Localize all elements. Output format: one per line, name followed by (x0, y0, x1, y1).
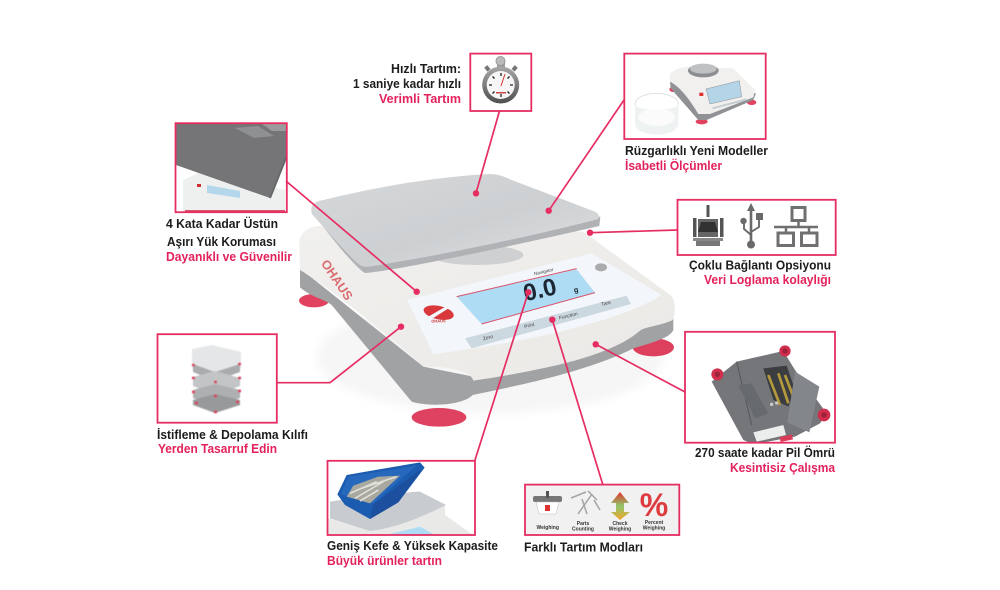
text: overload: Dayanıklı ve Güvenilir (166, 250, 292, 264)
icon: percent weighing: % (640, 487, 668, 523)
text: weighing modes: Farklı Tartım Modları (524, 540, 643, 554)
main product: precision scale (299, 174, 675, 427)
line: large pan (475, 289, 532, 460)
icon: check weighing: Weighing (609, 526, 631, 532)
frame (158, 334, 277, 423)
function button strip: Zero (482, 334, 494, 342)
LCD display: 0.0 (521, 273, 559, 307)
LCD display: g (573, 285, 579, 295)
text: fast weighing (353, 62, 461, 106)
text: draft shield: İsabetli Ölçümler (625, 158, 722, 173)
line: battery life (592, 341, 685, 392)
frame (624, 54, 766, 139)
image: stacked scales (192, 345, 241, 413)
icon: stopwatch (482, 56, 519, 104)
stainless steel pan rim (312, 210, 600, 273)
callout lines with anchor dots (277, 100, 685, 484)
scale soft shadow (317, 300, 663, 413)
OHAUS logo on panel: OHAUS (431, 318, 446, 324)
function button strip: Print (524, 322, 536, 330)
icon: weighing: Weighing (536, 525, 559, 531)
text: connectivity (689, 258, 831, 287)
function button strip: Tare (601, 300, 612, 308)
front foot (412, 408, 466, 427)
text: connectivity: Veri Loglama kolaylığı (704, 273, 831, 287)
text: draft shield: Rüzgarlıklı Yeni Modeller (625, 144, 768, 158)
line: stacking (277, 324, 404, 383)
line: overload protection (286, 181, 420, 295)
icon: check weighing: Check (612, 521, 628, 527)
text: draft shield (625, 144, 768, 173)
stainless steel pan (311, 174, 599, 267)
frame (328, 461, 475, 535)
rear left foot (299, 294, 329, 307)
icon: parts counting: Counting (572, 526, 594, 532)
icon: parts counting: Parts (577, 521, 589, 527)
frame (176, 123, 287, 212)
line: fast weighing (473, 111, 500, 196)
image: concrete block on scale (176, 124, 286, 213)
white housing (299, 226, 675, 381)
LCD display: Navigator (533, 267, 554, 276)
infographic canvas (156, 52, 837, 568)
panel: large pan and capacity (327, 461, 498, 568)
OHAUS side logo: OHAUS (318, 257, 355, 303)
frame (685, 332, 835, 443)
text: connectivity: Çoklu Bağlantı Opsiyonu (689, 258, 831, 272)
image: underside of scale with batteries (711, 345, 830, 444)
icon: percent weighing: Weighing (643, 526, 665, 532)
text: fast weighing: Verimli Tartım (379, 92, 461, 106)
text: battery life: 270 saate kadar Pil Ömrü (695, 445, 835, 460)
text: stacking (157, 427, 308, 456)
line: draft shield (546, 100, 624, 214)
text: stacking: İstifleme & Depolama Kılıfı (157, 427, 308, 442)
frame (470, 54, 531, 111)
frame (678, 200, 836, 255)
level indicator (595, 263, 607, 271)
panel: draft shield models (624, 54, 768, 173)
panel: fast weighing (353, 54, 531, 111)
icon: USB (740, 203, 763, 248)
text: fast weighing: 1 saniye kadar hızlı (353, 77, 461, 91)
OHAUS logo on panel (422, 303, 455, 324)
panel: battery life (685, 332, 836, 475)
LCD display (457, 267, 595, 324)
line: weighing modes (549, 316, 603, 484)
text: large pan (327, 539, 498, 568)
text: battery life: Kesintisiz Çalışma (730, 461, 836, 475)
icon: percent weighing: Percent (645, 520, 664, 526)
text: overload (166, 216, 292, 264)
text: stacking: Yerden Tasarruf Edin (158, 442, 277, 456)
panel background (525, 485, 679, 535)
image: small scale with draft ring (635, 64, 756, 135)
panel: stacking and storage (157, 334, 308, 456)
function button strip: Function (558, 311, 579, 322)
icon: parts counting (571, 491, 600, 532)
grey base (300, 268, 673, 405)
panel: overload protection (166, 123, 292, 264)
icon: network (774, 208, 818, 246)
control panel overlay (407, 253, 662, 354)
icon: serial connector (693, 205, 724, 246)
pan support (430, 245, 523, 265)
text: overload: 4 Kata Kadar Üstün (166, 216, 278, 231)
text: battery life (695, 445, 836, 475)
panel: connectivity (678, 200, 836, 287)
image: blue bin on scale (328, 462, 473, 537)
function button strip (465, 296, 631, 348)
panel: weighing modes (524, 485, 679, 554)
icon: weighing (533, 491, 562, 531)
rear right foot (633, 338, 674, 356)
text: overload: Aşırı Yük Koruması (167, 235, 276, 249)
text: fast weighing: Hızlı Tartım: (391, 62, 461, 76)
text: large pan: Büyük ürünler tartın (327, 554, 442, 568)
icon: check weighing (609, 492, 631, 532)
text: large pan: Geniş Kefe & Yüksek Kapasite (327, 539, 498, 553)
line: connectivity (587, 230, 677, 236)
